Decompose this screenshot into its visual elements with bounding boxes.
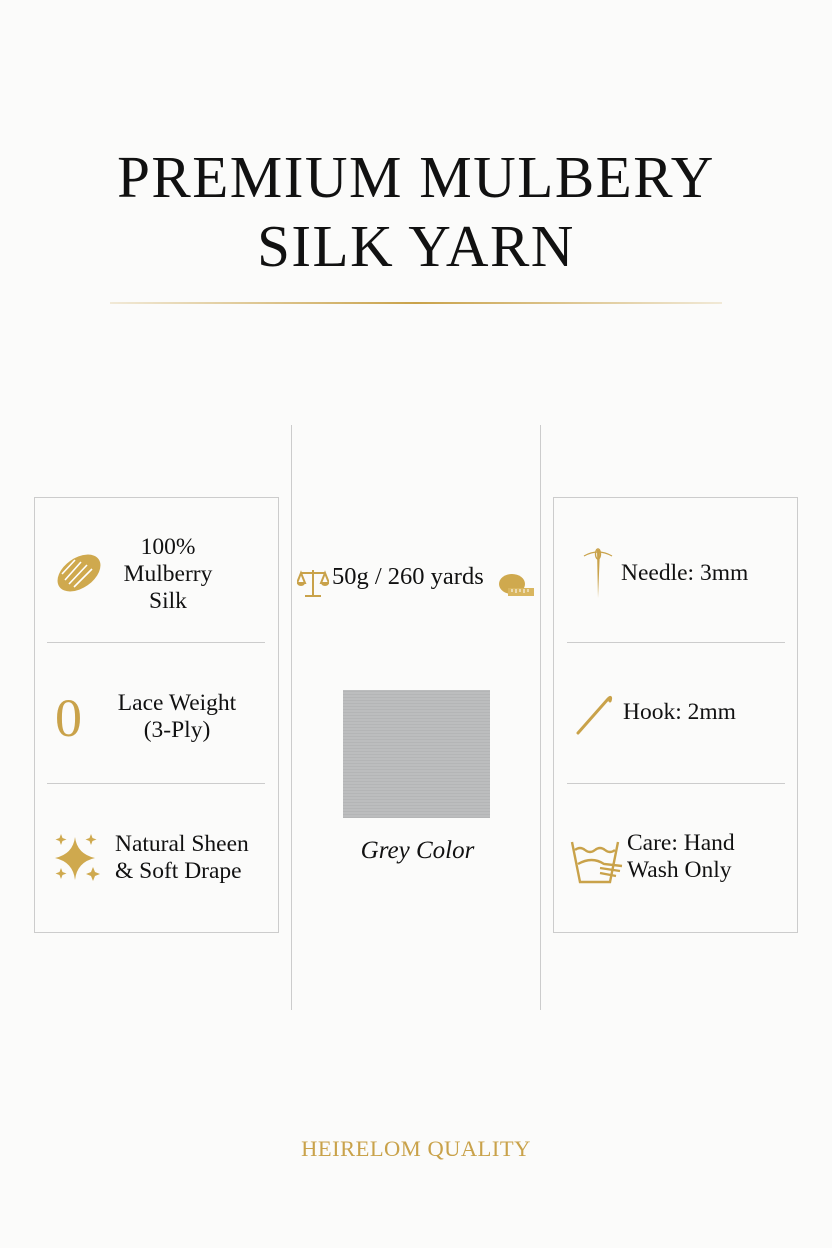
icon: hand wash bbox=[570, 842, 622, 884]
icon: sparkles bbox=[55, 834, 100, 881]
text: sheen: Natural Sheen bbox=[115, 831, 249, 857]
title: PREMIUM MULBERY bbox=[117, 144, 715, 210]
text: care: Care: Hand bbox=[627, 830, 735, 856]
text: mulberry silk: Silk bbox=[149, 588, 187, 614]
icon: scale bbox=[297, 570, 329, 597]
text: lace weight: (3-Ply) bbox=[144, 717, 210, 743]
footer: HEIRELOM QUALITY bbox=[301, 1136, 531, 1161]
text: weight yards: 50g / 260 yards bbox=[332, 563, 484, 590]
text: sheen: & Soft Drape bbox=[115, 858, 242, 884]
icon: tape measure bbox=[499, 574, 534, 596]
text: needle: Needle: 3mm bbox=[621, 560, 748, 586]
title bbox=[117, 144, 715, 279]
text: hook: Hook: 2mm bbox=[623, 699, 736, 725]
text: mulberry silk: 100% bbox=[141, 534, 195, 560]
text: care bbox=[627, 830, 735, 883]
icon: zero: 0 bbox=[55, 688, 82, 748]
icon: hook bbox=[576, 696, 612, 735]
text: mulberry silk bbox=[124, 534, 212, 614]
text: mulberry silk: Mulberry bbox=[124, 561, 212, 587]
text: care: Wash Only bbox=[627, 857, 732, 883]
text: lace weight: Lace Weight bbox=[118, 690, 236, 716]
gold rule bbox=[110, 302, 722, 304]
panel: right tools and care bbox=[553, 497, 798, 933]
text: grey color: Grey Color bbox=[361, 837, 474, 864]
icon: cocoon bbox=[58, 554, 100, 592]
swatch: grey bbox=[343, 690, 490, 818]
title: SILK YARN bbox=[257, 213, 575, 279]
icon: needle bbox=[584, 548, 612, 598]
text: sheen bbox=[115, 831, 249, 884]
panel: left features bbox=[34, 497, 279, 933]
panel: center weight and color bbox=[297, 563, 534, 864]
text: lace weight bbox=[118, 690, 236, 743]
